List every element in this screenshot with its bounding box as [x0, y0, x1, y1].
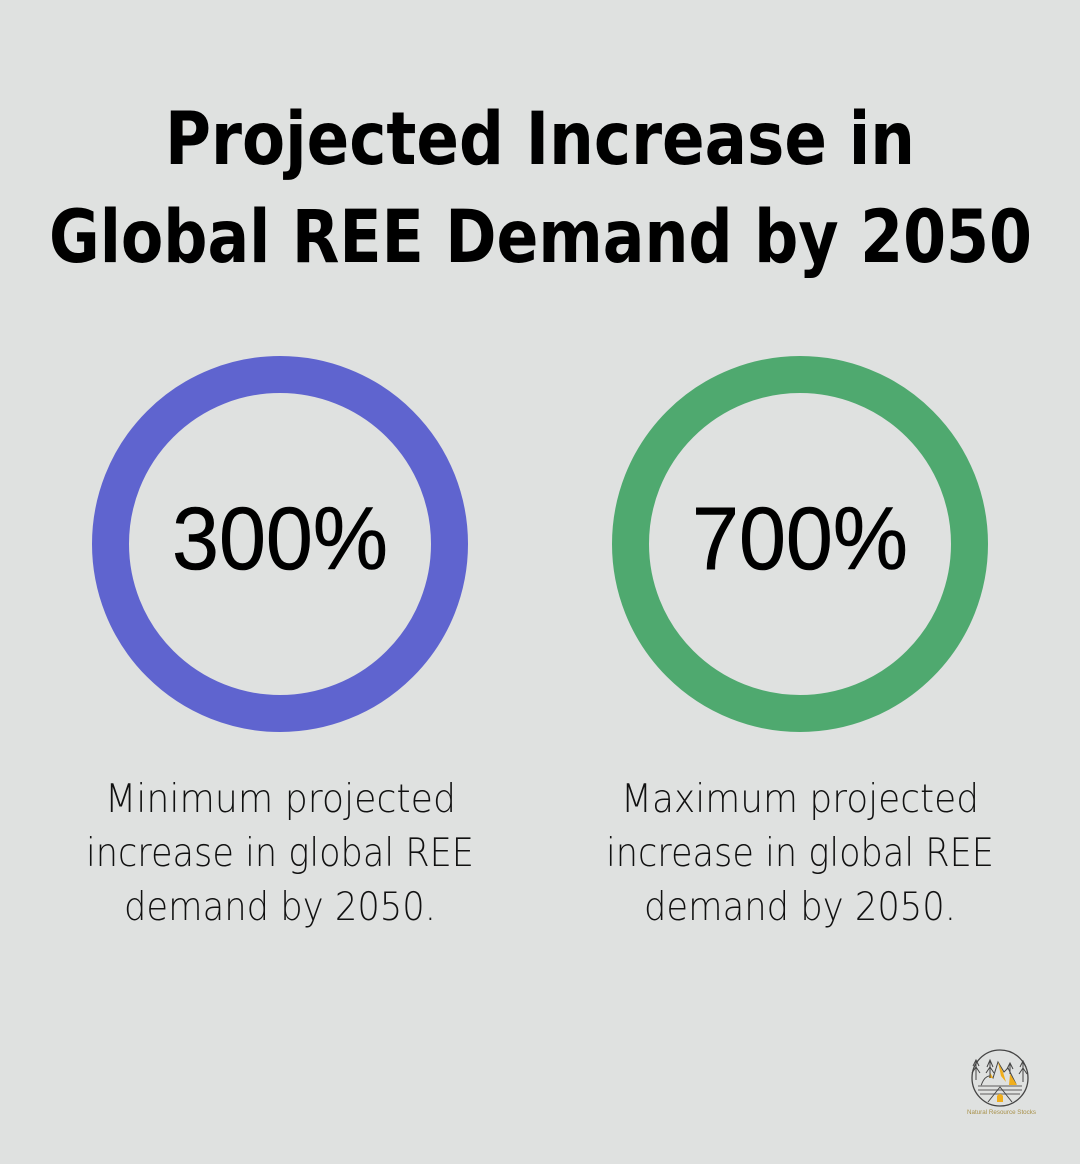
icon: mountains: [981, 1062, 1016, 1086]
stat: 700%: 700%: [692, 488, 908, 588]
icon: tent: [988, 1087, 1012, 1102]
description: minimum: [86, 777, 474, 930]
description: minimum: demand by 2050.: [124, 885, 436, 930]
description: maximum: demand by 2050.: [644, 885, 956, 930]
description: minimum: increase in global REE: [86, 831, 474, 876]
ring: green: [630, 374, 970, 714]
logo: Natural Resource Stocks: [967, 1050, 1037, 1116]
description: maximum: increase in global REE: [606, 831, 994, 876]
description: maximum: [606, 777, 994, 930]
title: [49, 97, 1032, 280]
logo text: Natural Resource Stocks: [967, 1109, 1037, 1116]
panel: maximum projection: [606, 374, 994, 930]
icon: water lines: [978, 1086, 1022, 1094]
title: Projected Increase in: [165, 97, 915, 182]
stat: 300%: 300%: [172, 488, 388, 588]
description: maximum: Maximum projected: [621, 777, 979, 822]
description: minimum: Minimum projected: [105, 777, 456, 822]
icon: trees: [972, 1060, 1027, 1082]
panel: minimum projection: [86, 374, 474, 930]
ring: purple: [110, 374, 450, 714]
